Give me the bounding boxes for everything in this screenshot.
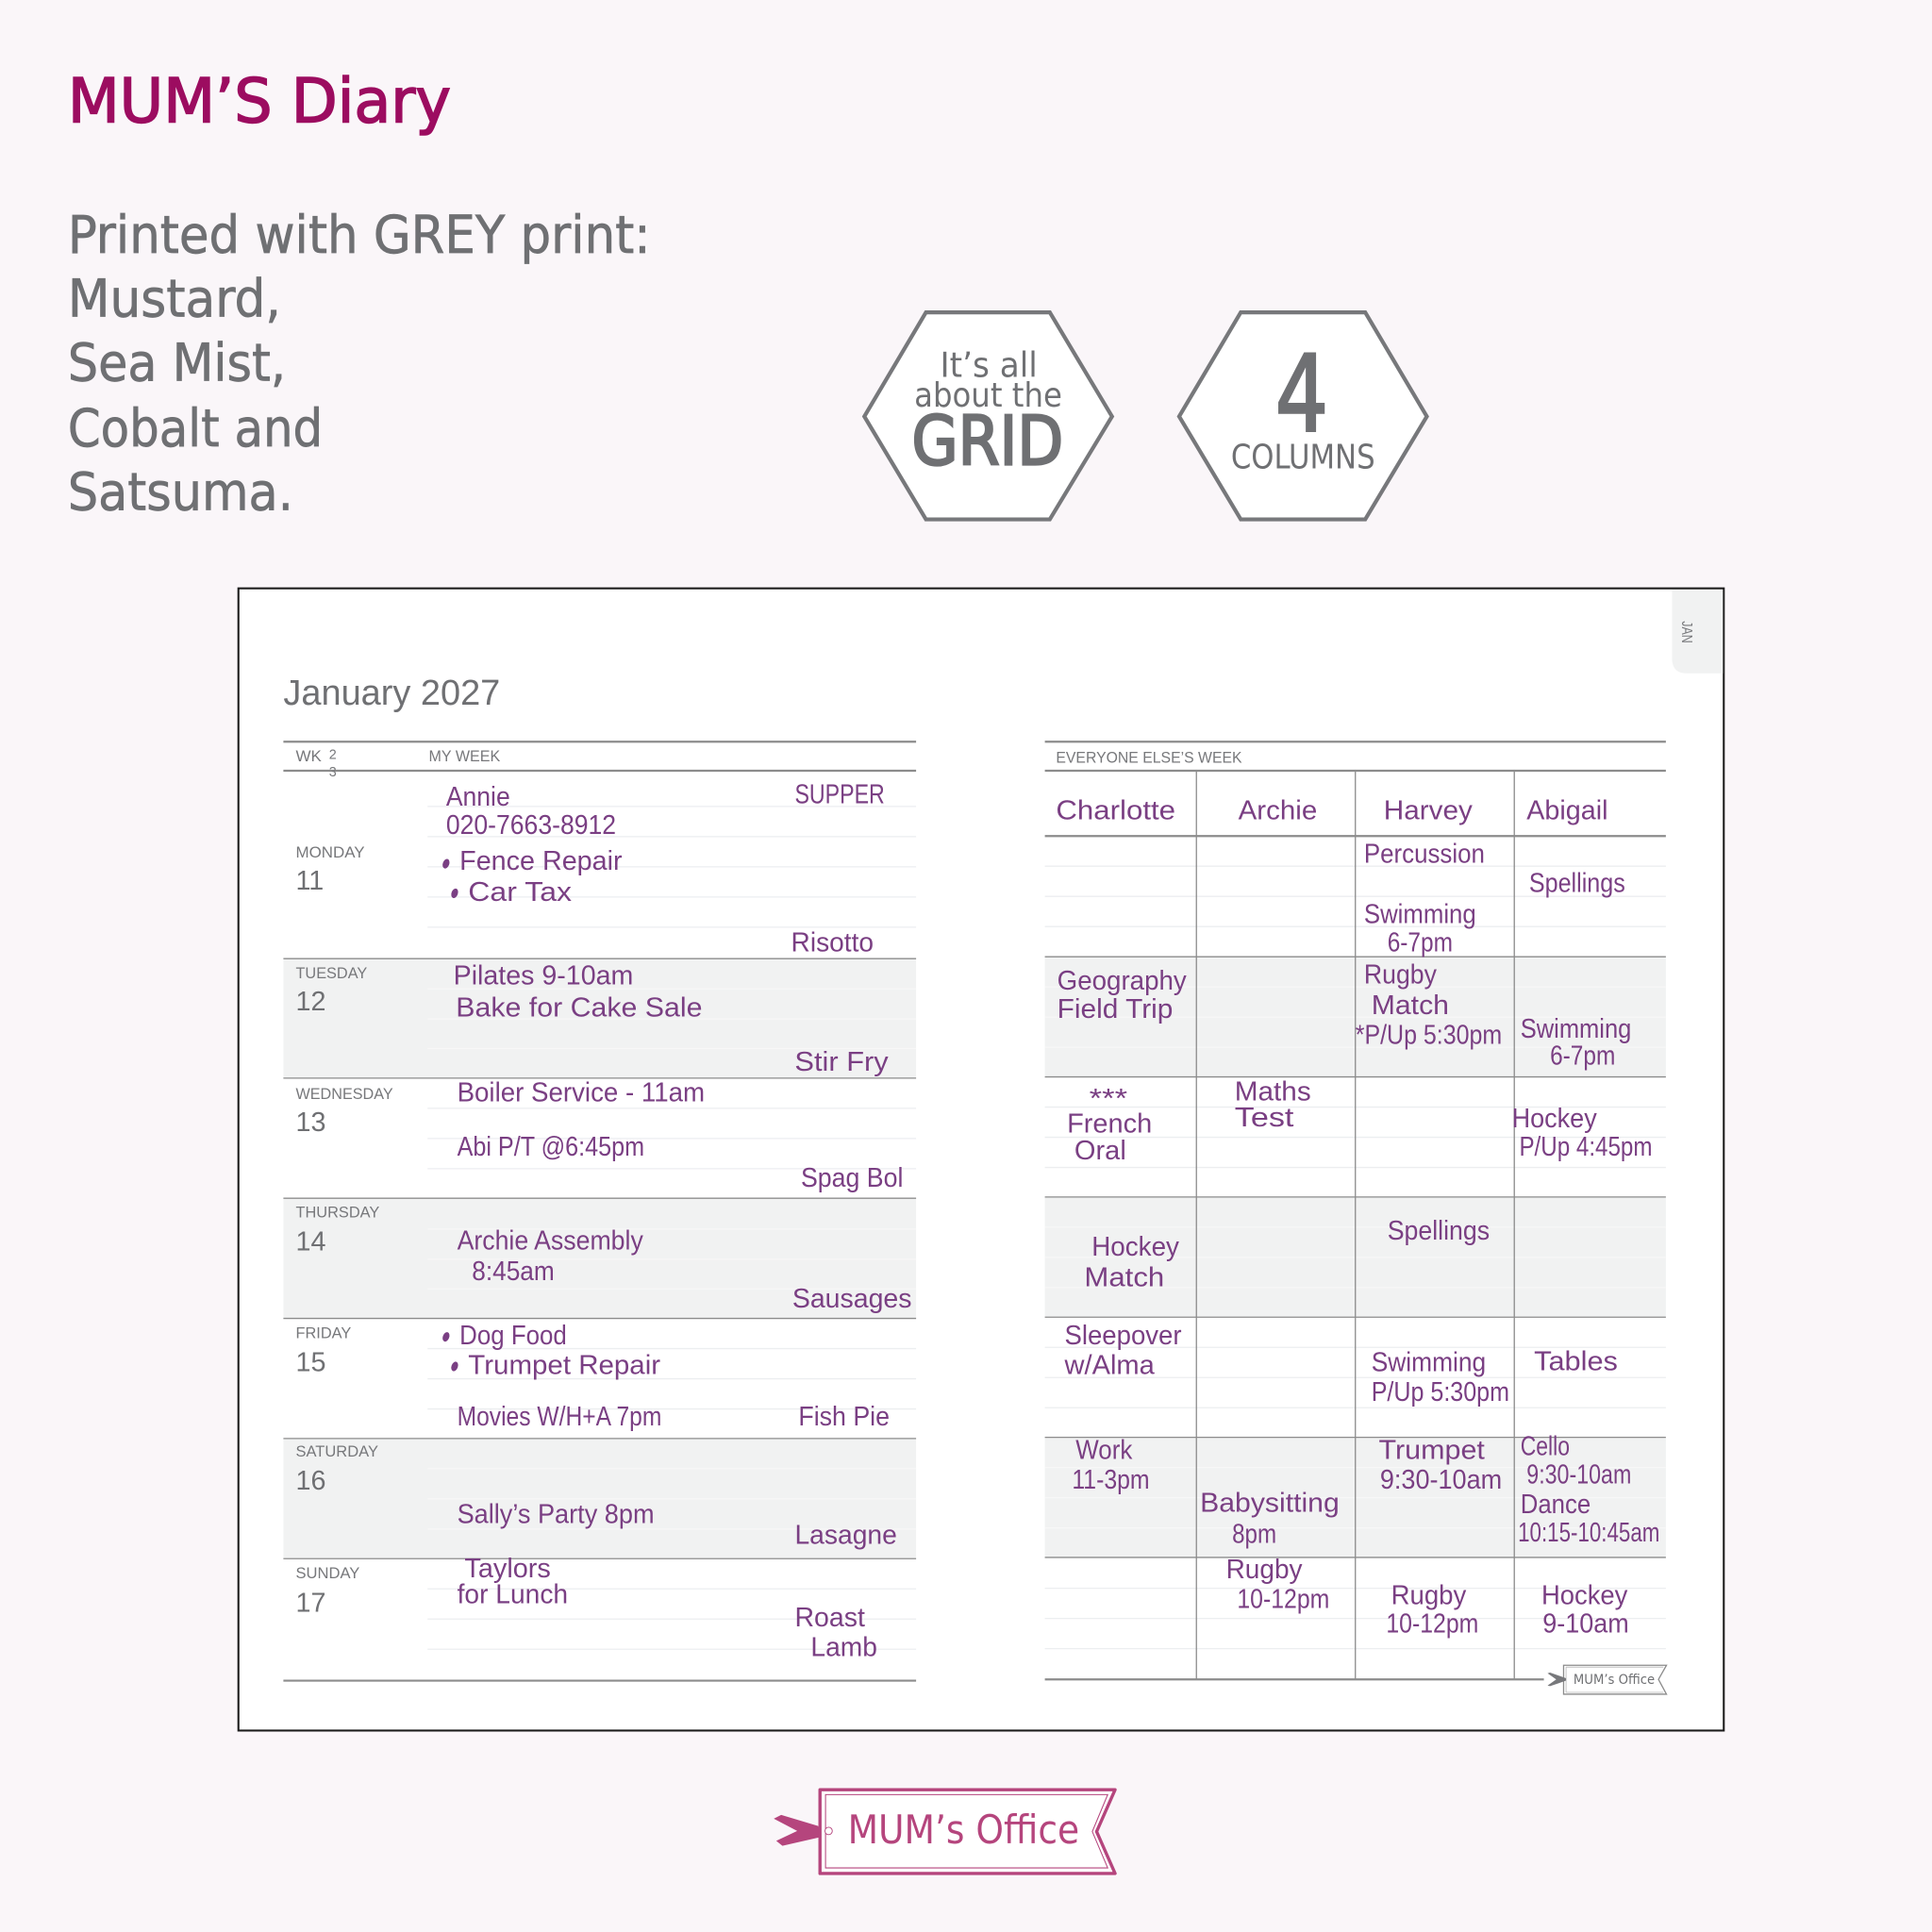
print colours text block [68, 205, 651, 523]
column header: everyone else's week: EVERYONE ELSE’S WEEK [1056, 748, 1242, 766]
brand tag: MUM's Office [774, 1790, 1115, 1874]
badge: all about the grid: It’s all [941, 345, 1038, 386]
column: abigail: Dance [1521, 1490, 1591, 1520]
day: friday [295, 1321, 890, 1432]
column: harvey: Swimming [1364, 899, 1476, 929]
column: archie: Maths [1235, 1076, 1311, 1107]
day: tuesday: TUESDAY [295, 964, 367, 982]
column: charlotte: Sleepover [1064, 1321, 1182, 1351]
day: wednesday: 13 [295, 1108, 325, 1138]
column: harvey: Harvey [1384, 796, 1473, 826]
day: thursday: THURSDAY [295, 1203, 379, 1221]
day: friday: Dog Food [459, 1321, 567, 1351]
column: archie: Babysitting [1200, 1489, 1340, 1519]
column: abigail: 9:30-10am [1526, 1460, 1631, 1491]
month tab [1672, 590, 1723, 674]
day: saturday: Sally’s Party 8pm [458, 1499, 655, 1529]
day: saturday: SATURDAY [295, 1442, 378, 1460]
column: abigail: Hockey [1541, 1581, 1628, 1611]
badge: all about the grid [864, 312, 1112, 520]
column: abigail: Tables [1534, 1346, 1618, 1376]
day: friday: FRIDAY [295, 1324, 351, 1341]
day: monday: MONDAY [295, 843, 365, 861]
badge: 4 columns: COLUMNS [1231, 438, 1375, 476]
day: saturday: 16 [295, 1466, 325, 1496]
day: thursday: 8:45am [472, 1257, 555, 1287]
day: thursday: 14 [295, 1227, 325, 1257]
column: archie: 8pm [1232, 1519, 1276, 1549]
page frame [239, 589, 1724, 1730]
column: harvey: Swimming [1372, 1348, 1486, 1378]
column: harvey: 6-7pm [1388, 927, 1453, 958]
day: friday: Movies W/H+A 7pm [458, 1402, 661, 1432]
column: charlotte: Field Trip [1058, 994, 1173, 1024]
small brand tag [1547, 1665, 1667, 1694]
day: saturday [295, 1442, 897, 1551]
column header: my week: MY WEEK [429, 747, 501, 765]
day: saturday: Lasagne [794, 1521, 897, 1551]
day: thursday [295, 1203, 912, 1314]
day: sunday: Taylors [464, 1554, 551, 1584]
column: abigail: 9-10am [1542, 1609, 1629, 1640]
column: abigail: Abigail [1526, 796, 1607, 826]
day: sunday: 17 [295, 1588, 325, 1618]
diary spread [239, 589, 1724, 1730]
column: harvey: Trumpet [1379, 1435, 1485, 1465]
column: harvey: P/Up 5:30pm [1372, 1377, 1509, 1407]
day: thursday: Sausages [792, 1284, 912, 1314]
print colours text block: Sea Mist, [68, 333, 286, 393]
column: charlotte: Charlotte [1056, 796, 1175, 826]
month tab: JAN [1678, 621, 1694, 643]
day: thursday: Archie Assembly [458, 1225, 643, 1256]
day: monday: 11 [295, 866, 324, 896]
day: tuesday: Bake for Cake Sale [456, 993, 702, 1024]
day: sunday: Lamb [810, 1632, 877, 1662]
column: harvey: *P/Up 5:30pm [1356, 1020, 1502, 1050]
column: harvey: Match [1372, 991, 1449, 1021]
column: archie [1200, 796, 1340, 1614]
column: abigail: Swimming [1521, 1014, 1631, 1044]
column header: my week: 3 [329, 765, 337, 780]
day: monday: Fence Repair [459, 846, 623, 876]
brand tag: MUM's Office: MUM’s Office [848, 1807, 1079, 1853]
day: wednesday [295, 1078, 903, 1193]
column header: my week: 2 [329, 748, 337, 763]
day: friday: Trumpet Repair [468, 1350, 661, 1380]
column: charlotte: Hockey [1091, 1232, 1180, 1262]
column: harvey [1356, 796, 1509, 1640]
column: harvey: Percussion [1364, 839, 1485, 869]
day: tuesday: Pilates 9-10am [454, 961, 633, 991]
tag ribbon [774, 1815, 821, 1846]
small brand tag: MUM’s Office [1574, 1673, 1655, 1688]
column: harvey: 10-12pm [1386, 1609, 1478, 1640]
badge: 4 columns: 4 [1275, 334, 1328, 457]
column: abigail [1512, 796, 1659, 1640]
column: charlotte [1056, 796, 1187, 1495]
column: charlotte: Work [1075, 1435, 1133, 1465]
day: wednesday: Abi P/T @6:45pm [458, 1132, 644, 1162]
day: sunday [295, 1554, 877, 1662]
column: charlotte: Match [1084, 1263, 1164, 1293]
column: harvey: 9:30-10am [1380, 1465, 1502, 1495]
column: abigail: Spellings [1529, 869, 1625, 899]
day: friday: 15 [295, 1348, 325, 1378]
day: friday: Fish Pie [798, 1402, 890, 1432]
title: MUM’S Diary [68, 65, 451, 137]
day: sunday: for Lunch [458, 1579, 568, 1609]
column header: my week: WK [295, 747, 323, 765]
day: monday: Annie [446, 782, 510, 812]
day: wednesday: WEDNESDAY [295, 1085, 393, 1103]
print colours text block: Satsuma. [68, 462, 293, 523]
badge: all about the grid: about the [914, 376, 1062, 415]
day: tuesday [295, 961, 889, 1077]
print colours text block: Mustard, [68, 269, 281, 329]
column header: my week [295, 747, 501, 780]
column: abigail: 10:15-10:45am [1518, 1518, 1659, 1548]
column: archie: Test [1235, 1103, 1293, 1133]
column: abigail: Cello [1521, 1432, 1570, 1462]
day: sunday: SUNDAY [295, 1564, 359, 1582]
column: archie: 10-12pm [1237, 1584, 1329, 1614]
day: monday: Risotto [791, 927, 874, 958]
month heading: January 2027 [283, 674, 500, 713]
column: charlotte: Geography [1058, 966, 1187, 996]
day: monday [295, 780, 885, 958]
column: harvey: Rugby [1391, 1581, 1467, 1611]
day: tuesday: Stir Fry [794, 1047, 889, 1077]
day: monday: 020-7663-8912 [446, 810, 616, 841]
column: charlotte: Oral [1074, 1136, 1126, 1166]
column: harvey: Spellings [1388, 1216, 1490, 1246]
column: archie: Archie [1239, 796, 1317, 826]
column: harvey: Rugby [1364, 959, 1438, 990]
day: sunday: Roast [794, 1603, 865, 1633]
column: charlotte: *** [1090, 1084, 1127, 1114]
day: tuesday: 12 [295, 987, 325, 1017]
column: abigail: Hockey [1512, 1104, 1597, 1134]
print colours text block: Printed with GREY print: [68, 205, 651, 265]
column: abigail: 6-7pm [1550, 1041, 1615, 1071]
column: archie: Rugby [1226, 1555, 1303, 1585]
column: charlotte: w/Alma [1063, 1350, 1155, 1380]
badge: all about the grid: GRID [912, 401, 1063, 480]
day: wednesday: Boiler Service - 11am [458, 1078, 705, 1108]
print colours text block: Cobalt and [68, 398, 323, 458]
column: charlotte: French [1067, 1108, 1152, 1139]
day: monday: Car Tax [468, 877, 573, 908]
badge: 4 columns [1179, 312, 1426, 520]
day: monday: SUPPER [794, 780, 885, 810]
panel: my week [283, 741, 916, 1681]
panel: everyone else's week [1045, 741, 1666, 1679]
column: abigail: P/Up 4:45pm [1519, 1132, 1653, 1162]
day: wednesday: Spag Bol [801, 1163, 903, 1193]
column: charlotte: 11-3pm [1072, 1465, 1150, 1495]
